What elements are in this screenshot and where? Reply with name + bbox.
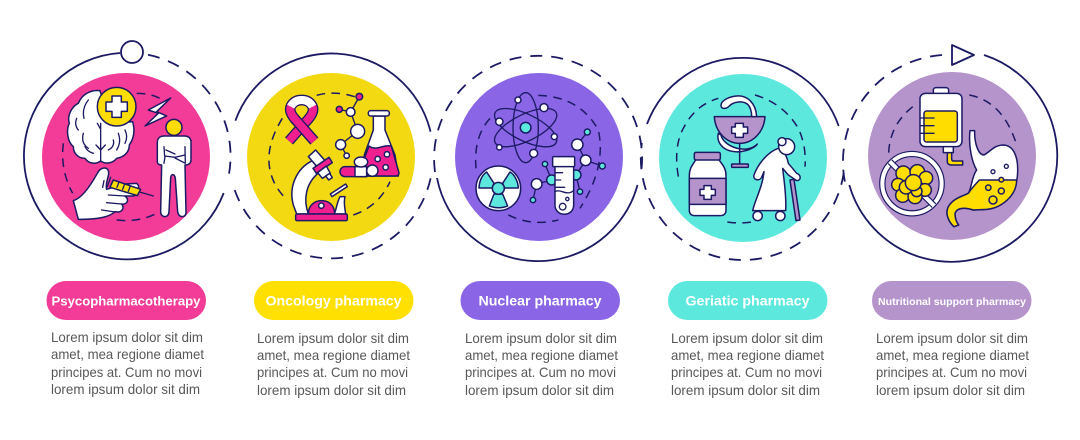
- ring 1: [24, 41, 231, 259]
- icon: pill bottle: [689, 152, 726, 216]
- text block 1: amet, mea regione diamet: [51, 346, 204, 362]
- text block 3: Lorem ipsum dolor sit dim: [465, 330, 617, 346]
- step 1: psycopharmacotherapy circle: [24, 41, 231, 259]
- icon: radiation: [476, 166, 521, 211]
- text block 5: [876, 330, 1029, 398]
- pill: Psycopharmacotherapy: Psycopharmacotherapy: [52, 294, 201, 308]
- text block 4: principes at. Cum no movi: [671, 364, 822, 380]
- text block 2: lorem ipsum dolor sit dim: [257, 382, 406, 398]
- text block 5: principes at. Cum no movi: [876, 364, 1027, 380]
- pill: Nutritional support pharmacy: Nutritional support pharmacy: [878, 296, 1026, 308]
- icon: atom: [489, 93, 562, 163]
- icon: ribbon: [289, 100, 314, 141]
- text block 2: amet, mea regione diamet: [257, 347, 410, 363]
- icon: test tube: [553, 157, 575, 214]
- text block 5: Lorem ipsum dolor sit dim: [876, 330, 1028, 346]
- icon: bowl with snake: [714, 96, 765, 167]
- text block 3: principes at. Cum no movi: [465, 364, 616, 380]
- icon: microscope: [292, 150, 347, 221]
- icons: bowl of hygieia, bottle, elderly woman: [677, 95, 805, 223]
- text block 2: principes at. Cum no movi: [257, 364, 408, 380]
- disc 3: [455, 73, 623, 241]
- pill: Nuclear pharmacy: [460, 281, 620, 320]
- icons: atom, radiation, test tube: [476, 93, 605, 222]
- pill: Psycopharmacotherapy: [46, 281, 206, 320]
- step 3: nuclear pharmacy circle: [434, 56, 642, 261]
- pill: Nutritional support pharmacy: [872, 281, 1032, 320]
- text block 1: [51, 329, 204, 397]
- icon: syringe: [103, 177, 153, 196]
- text block 4: amet, mea regione diamet: [671, 347, 824, 363]
- icon: finger lines: [102, 195, 125, 212]
- pill: Oncology pharmacy: Oncology pharmacy: [266, 292, 402, 308]
- icon: lightning: [145, 98, 171, 126]
- icon: molecule: [336, 93, 365, 158]
- icon: brain: [68, 90, 134, 163]
- text block 1: lorem ipsum dolor sit dim: [51, 381, 200, 397]
- text block 4: [671, 330, 824, 398]
- icon: molecules: [530, 129, 605, 203]
- label 3: pill and text: [460, 281, 620, 398]
- disc 5: [868, 72, 1036, 240]
- icon: standing person: [157, 119, 191, 217]
- icon: pills: [340, 157, 378, 177]
- label 1: pill and text: [46, 281, 206, 397]
- label 2: pill and text: [254, 281, 414, 398]
- pill: Geriatic pharmacy: [668, 281, 828, 320]
- icons: ribbon, molecule, flask, microscope: [269, 93, 399, 221]
- icon: stomach: [947, 131, 1018, 227]
- text block 5: lorem ipsum dolor sit dim: [876, 382, 1025, 398]
- ring 2: [233, 53, 431, 258]
- pill: Geriatic pharmacy: Geriatic pharmacy: [686, 292, 810, 308]
- text block 3: lorem ipsum dolor sit dim: [465, 382, 614, 398]
- ring 4: [641, 58, 844, 260]
- icons: IV bag, blocked cells, stomach: [882, 88, 1018, 227]
- icons: brain, person, hand with syringe: [63, 87, 191, 221]
- disc 2: [247, 73, 415, 241]
- text block 2: [257, 330, 410, 398]
- icon: crossed out cells: [882, 154, 942, 213]
- label 5: pill and text: [872, 281, 1032, 398]
- ring 3: [434, 56, 642, 261]
- icon: elderly woman: [753, 138, 800, 221]
- label 4: pill and text: [668, 281, 828, 398]
- step 2: oncology pharmacy circle: [233, 53, 431, 258]
- pill: Nuclear pharmacy: Nuclear pharmacy: [478, 292, 602, 308]
- icon: IV bag: [920, 88, 963, 165]
- step 5: nutritional support circle: [843, 45, 1057, 262]
- disc 1: [42, 73, 210, 241]
- text block 4: lorem ipsum dolor sit dim: [671, 382, 820, 398]
- text block 3: [465, 330, 618, 398]
- text block 4: Lorem ipsum dolor sit dim: [671, 330, 823, 346]
- text block 1: principes at. Cum no movi: [51, 364, 202, 380]
- icon: flask: [360, 111, 399, 176]
- pill: Oncology pharmacy: [254, 281, 414, 320]
- text block 1: Lorem ipsum dolor sit dim: [51, 329, 203, 345]
- icon: hand: [73, 168, 139, 219]
- text block 3: amet, mea regione diamet: [465, 347, 618, 363]
- text block 2: Lorem ipsum dolor sit dim: [257, 330, 409, 346]
- text block 5: amet, mea regione diamet: [876, 347, 1029, 363]
- disc 4: [659, 74, 827, 242]
- ring 5: [843, 45, 1057, 262]
- step 4: geriatric pharmacy circle: [641, 58, 844, 260]
- icon: medical badge: [97, 87, 136, 126]
